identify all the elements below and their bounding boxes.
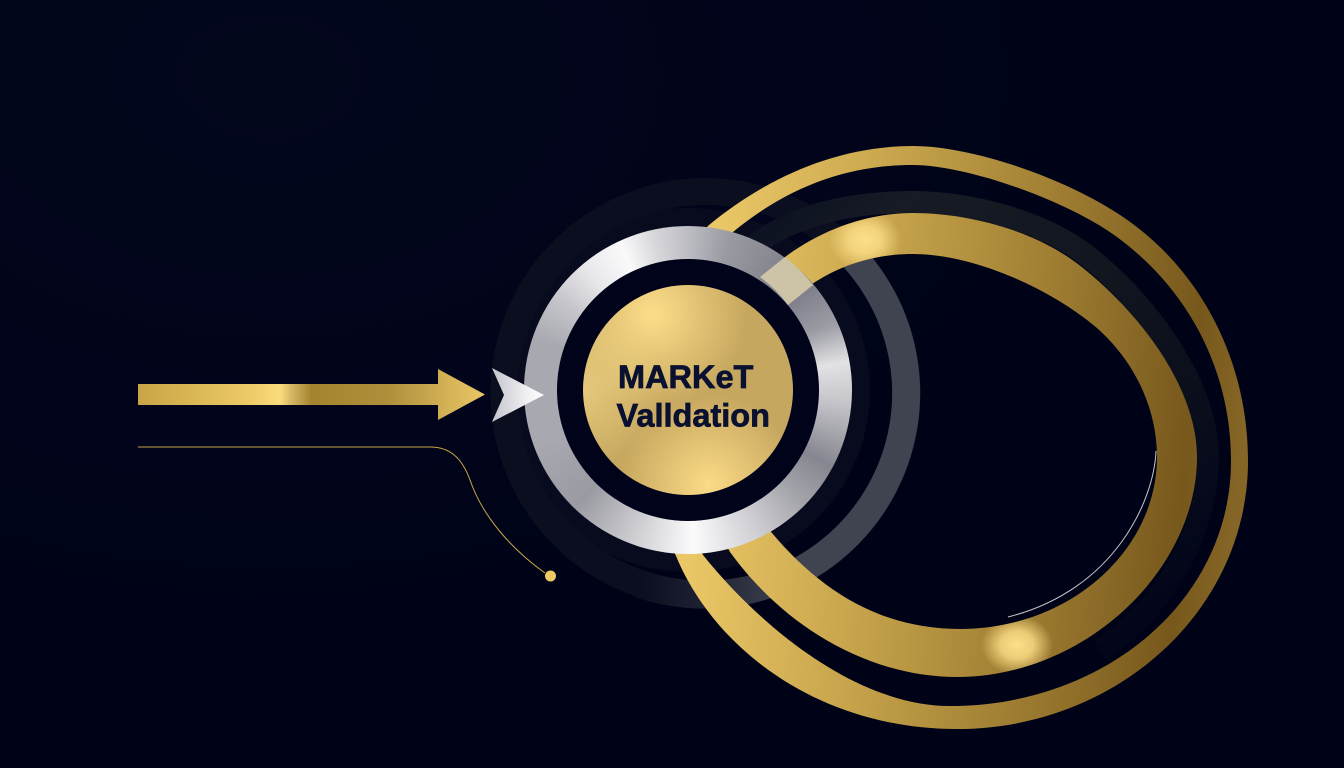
translucent patch on silver ring <box>760 257 813 305</box>
gold central disc <box>583 285 793 495</box>
label line 1: MARKeT <box>618 359 754 395</box>
faint offset ring <box>504 192 907 594</box>
grey arc of offset ring <box>640 237 906 595</box>
glow: bottom of inner ring <box>984 618 1051 672</box>
thin gold connector line with end dot <box>138 447 556 582</box>
gold arrow <box>138 369 485 420</box>
dark gap inside silver ring <box>557 259 819 521</box>
outer gold ring <box>649 146 1248 729</box>
rings and arrows behind the central badge <box>138 146 1248 729</box>
glow: top of inner ring <box>833 216 898 264</box>
dark shadow band above inner gold ring <box>748 202 1208 650</box>
thin white arc inside gold ring <box>1008 451 1156 617</box>
disc label <box>616 359 770 434</box>
label line 2: Valldation <box>616 398 770 434</box>
faint halo ring around badge <box>515 217 861 563</box>
inner gold ring <box>728 213 1197 677</box>
silver ring <box>524 226 852 554</box>
